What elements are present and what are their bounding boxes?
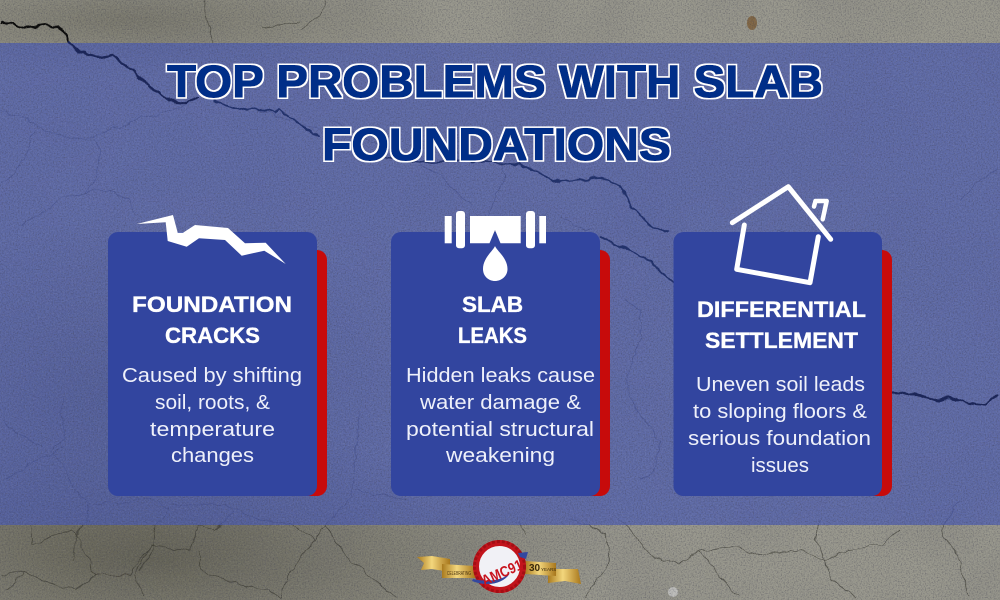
body text: Uneven soil leads [696, 374, 865, 396]
icon: leaking pipe [445, 211, 546, 281]
card accent [270, 250, 327, 496]
body text [122, 365, 302, 467]
heading [132, 292, 292, 348]
panel: slab leaks [391, 211, 610, 496]
heading: SETTLEMENT [705, 328, 859, 353]
logo badge: CELEBRATING [447, 571, 471, 577]
icon: crack [137, 215, 286, 264]
body text: to sloping floors & [693, 401, 868, 423]
logo badge: YEARS [541, 567, 556, 572]
body text: temperature [150, 419, 275, 441]
body text: issues [751, 455, 809, 477]
heading: SLAB [462, 292, 523, 317]
body text [406, 365, 595, 467]
logo badge: AMC91 [479, 557, 525, 590]
panel: differential settlement [674, 187, 892, 496]
body text: weakening [445, 445, 555, 467]
heading: LEAKS [458, 323, 527, 348]
card body [391, 232, 600, 496]
logo badge: 30 [529, 563, 541, 574]
gold ribbon [417, 556, 581, 584]
card body [108, 232, 317, 496]
heading: DIFFERENTIAL [697, 297, 866, 322]
title: TOP PROBLEMS WITH SLAB [167, 56, 823, 107]
card accent [553, 250, 610, 496]
card accent [835, 250, 892, 496]
icon: tilted house [732, 187, 831, 283]
body text: Hidden leaks cause [406, 365, 595, 387]
heading: FOUNDATION [132, 292, 292, 317]
heading [458, 292, 527, 348]
logo badge [417, 542, 581, 592]
body text: changes [171, 445, 254, 467]
heading: CRACKS [165, 323, 260, 348]
panel: foundation cracks [108, 215, 327, 496]
body text: Caused by shifting [122, 365, 302, 387]
main crack [2, 23, 998, 405]
body text: potential structural [406, 419, 594, 441]
body text: serious foundation [688, 428, 871, 450]
body text [688, 374, 871, 477]
seal [476, 543, 523, 590]
body text: soil, roots, & [155, 392, 271, 414]
body text: water damage & [419, 392, 582, 414]
title [167, 56, 823, 170]
title: FOUNDATIONS [322, 119, 671, 170]
card body [674, 232, 882, 496]
heading [697, 297, 866, 353]
